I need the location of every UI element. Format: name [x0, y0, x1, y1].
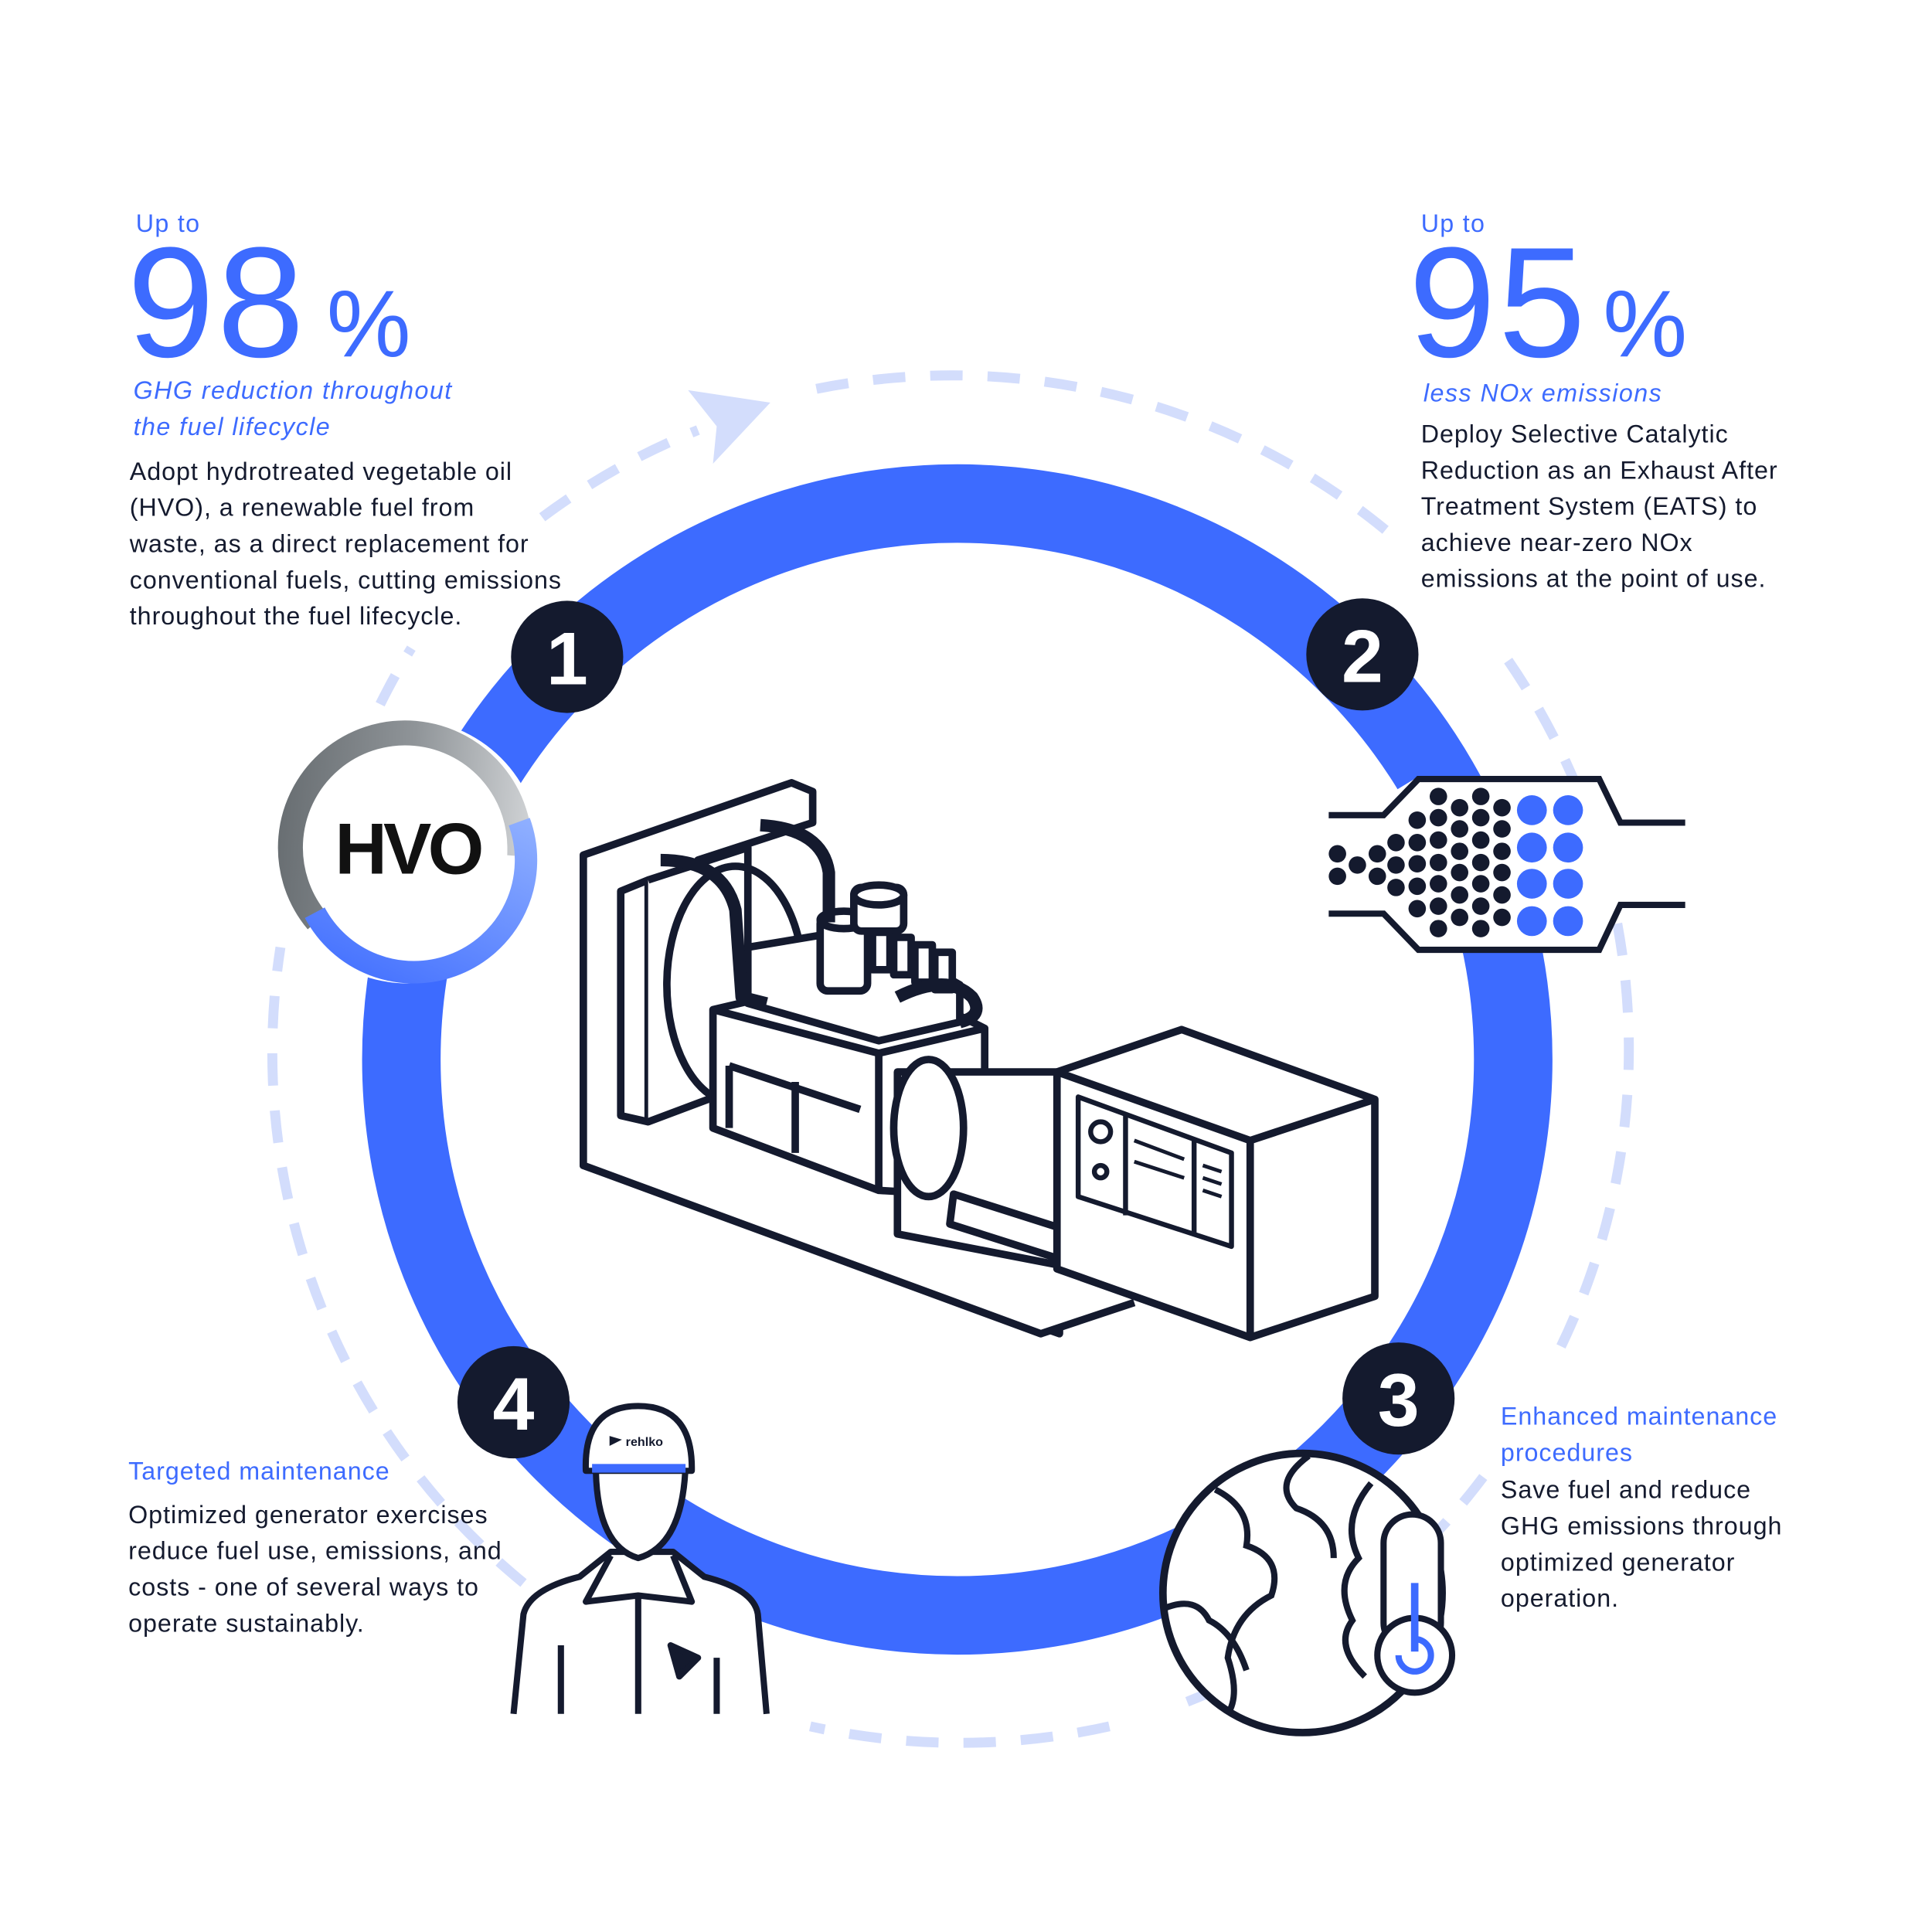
text block 4: reduce fuel use, emissions, and — [128, 1537, 502, 1565]
icon: technician — [514, 1406, 767, 1714]
text block 2 — [1421, 420, 1778, 593]
text block 1: conventional fuels, cutting emissions — [130, 566, 562, 594]
generator illustration — [583, 783, 1375, 1338]
text block 1 — [129, 457, 562, 630]
icon: technician: rehlko — [626, 1435, 663, 1449]
text block 4: operate sustainably. — [128, 1609, 365, 1637]
stat: 95%: less NOx emissions — [1423, 379, 1662, 406]
text block 3 — [1501, 1403, 1782, 1612]
text block 1: (HVO), a renewable fuel from — [130, 494, 474, 522]
text block 1: Adopt hydrotreated vegetable oil — [130, 457, 512, 485]
stat: 95%: % — [1603, 270, 1687, 376]
badge 1 — [511, 600, 623, 713]
stat: 98%: the fuel lifecycle — [134, 413, 331, 440]
badge 4 — [457, 1346, 570, 1458]
text block 3: GHG emissions through — [1501, 1512, 1782, 1539]
HVO badge — [243, 686, 566, 1009]
text block 1: waste, as a direct replacement for — [129, 530, 529, 558]
text block 3: Enhanced maintenance — [1501, 1403, 1777, 1430]
text block 2: Reduction as an Exhaust After — [1421, 456, 1778, 484]
badge 4: 4 — [493, 1362, 535, 1446]
text block 2: Deploy Selective Catalytic — [1421, 420, 1729, 448]
stat: 95%: 95 — [1409, 215, 1588, 390]
text block 3: operation. — [1501, 1584, 1619, 1612]
stat: 98%: 98 — [128, 215, 307, 390]
badge 3: 3 — [1378, 1358, 1420, 1442]
stat: 98%: % — [327, 270, 411, 376]
badge 1: 1 — [546, 616, 588, 700]
text block 4 — [128, 1458, 502, 1637]
badge 3 — [1342, 1342, 1454, 1454]
main blue ring — [401, 504, 1513, 1615]
stat: 95% — [1409, 209, 1687, 406]
stat: 98% — [128, 209, 453, 440]
arrow head on dashed ring — [688, 390, 770, 464]
text block 2: achieve near-zero NOx — [1421, 529, 1693, 556]
badge 2: 2 — [1342, 614, 1383, 698]
icon: catalytic filter — [1328, 777, 1685, 951]
text block 3: procedures — [1501, 1438, 1633, 1466]
stat: 98%: Up to — [136, 209, 200, 237]
stat: 98%: GHG reduction throughout — [134, 376, 453, 404]
text block 3: optimized generator — [1501, 1548, 1735, 1576]
text block 4: costs - one of several ways to — [128, 1573, 479, 1601]
stat: 95%: Up to — [1421, 209, 1485, 237]
HVO badge: HVO — [335, 808, 481, 889]
text block 1: throughout the fuel lifecycle. — [130, 602, 462, 630]
badge 2 — [1306, 598, 1418, 710]
text block 4: Targeted maintenance — [128, 1458, 390, 1485]
text block 2: Treatment System (EATS) to — [1421, 492, 1757, 520]
text block 3: Save fuel and reduce — [1501, 1476, 1751, 1504]
dashed outer cycle ring — [272, 376, 1629, 1743]
text block 2: emissions at the point of use. — [1421, 565, 1766, 593]
icon: globe with thermometer — [1163, 1454, 1452, 1733]
text block 4: Optimized generator exercises — [128, 1501, 488, 1529]
